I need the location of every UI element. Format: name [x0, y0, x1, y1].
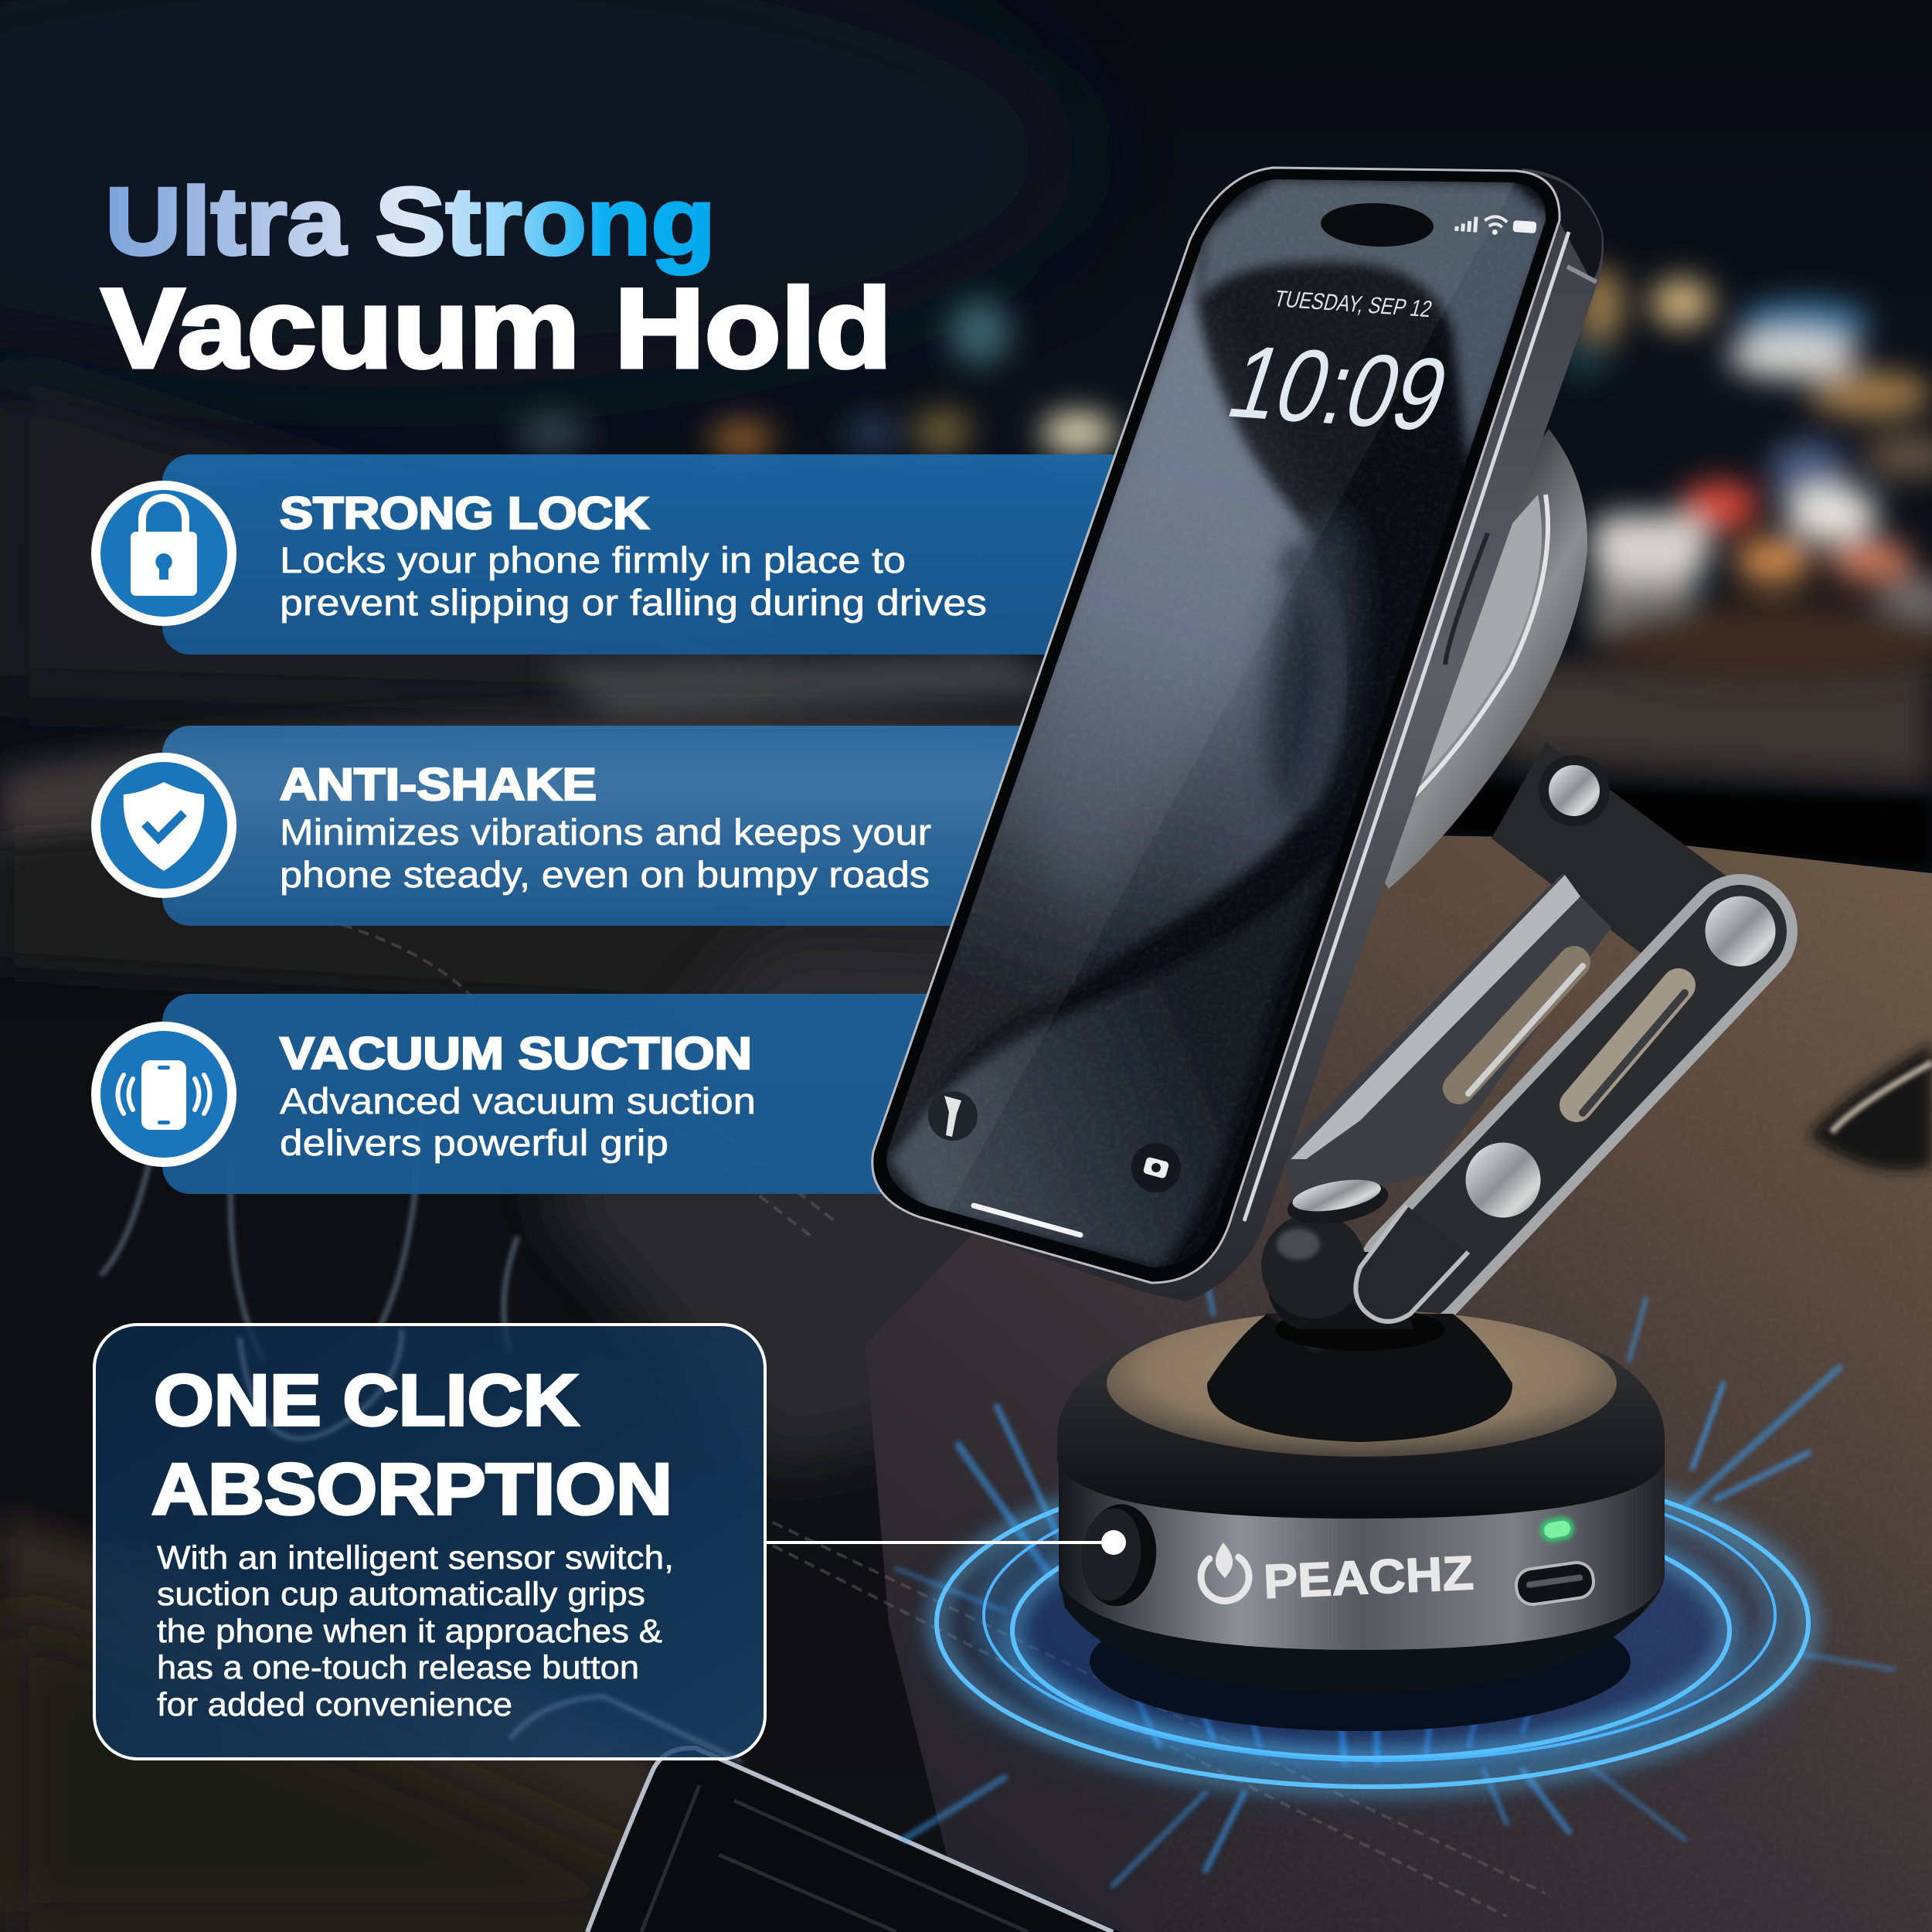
- heading: ANTI-SHAKE: [280, 760, 597, 810]
- main slot: [1577, 985, 1679, 1105]
- home indicator: [974, 1206, 1080, 1235]
- logo mark: [1199, 1541, 1250, 1602]
- pivot bolts: [1464, 755, 1777, 1219]
- dark vent shape on right dashboard: [1808, 1043, 1932, 1171]
- icon: padlock: [96, 485, 232, 621]
- icon: shield check: [96, 757, 232, 893]
- outer ring: [937, 1459, 1808, 1787]
- callout body: has a one-touch release button: [157, 1649, 639, 1686]
- body text: [280, 539, 987, 623]
- camera icon: [1131, 1143, 1181, 1192]
- status LED: [1539, 1515, 1576, 1544]
- suction glow rings and rays: [896, 1275, 1893, 1886]
- brand name: PEACHZ: [1263, 1546, 1475, 1609]
- status icons: [1454, 214, 1537, 238]
- connector line and dot: [765, 1530, 1126, 1555]
- middle ring: [984, 1470, 1775, 1760]
- title line 2: Vacuum Hold: [101, 265, 892, 391]
- flashlight icon: [928, 1091, 978, 1141]
- body text: delivers powerful grip: [280, 1122, 668, 1163]
- callout body: suction cup automatically grips: [157, 1576, 645, 1613]
- stem: [1275, 1308, 1445, 1351]
- rear silver link: [1283, 873, 1611, 1206]
- upper arm link: [1492, 742, 1785, 1005]
- heading: STRONG LOCK: [280, 488, 649, 539]
- lid: [1057, 1314, 1665, 1519]
- body text: phone steady, even on bumpy roads: [280, 854, 930, 895]
- body text: prevent slipping or falling during drives: [280, 582, 987, 623]
- lid top reflection: [1107, 1310, 1617, 1457]
- callout body: With an intelligent sensor switch,: [157, 1539, 674, 1577]
- dynamic island: [1320, 201, 1434, 249]
- date text: TUESDAY, SEP 12: [1271, 287, 1435, 322]
- knob: [1284, 1173, 1392, 1231]
- lock screen: [886, 179, 1546, 1267]
- USB-C port: [1514, 1560, 1596, 1607]
- wallpaper grain: [850, 155, 1584, 1298]
- callout heading: ONE CLICK: [154, 1359, 579, 1440]
- phone side frame: [889, 168, 1604, 1301]
- title: [101, 168, 892, 391]
- callout body: for added convenience: [157, 1686, 512, 1723]
- callout body: [157, 1539, 674, 1723]
- side highlight: [1244, 232, 1569, 1221]
- rear slot: [1459, 962, 1574, 1088]
- magnetic disc behind phone: [1314, 429, 1587, 889]
- title line 1: Ultra Strong: [105, 168, 716, 275]
- callout body: the phone when it approaches &: [157, 1613, 662, 1650]
- folding arm: [1283, 742, 1785, 1275]
- wallpaper light area: [872, 229, 1339, 1159]
- body text: [280, 1080, 756, 1163]
- body text: Minimizes vibrations and keeps your: [280, 811, 931, 852]
- panel: anti-shake: [96, 726, 1167, 926]
- stitching lines: [325, 920, 1546, 1917]
- phone: [850, 155, 1604, 1301]
- bokeh lights: [518, 267, 1932, 680]
- panel: vacuum suction: [96, 994, 1167, 1194]
- callout: one click absorption: [94, 1325, 765, 1762]
- main arm lower end outline: [1355, 1206, 1468, 1321]
- body text: Advanced vacuum suction: [280, 1080, 756, 1121]
- clock: 10:09: [1216, 324, 1462, 452]
- callout heading: [151, 1359, 672, 1529]
- callout heading: ABSORPTION: [151, 1448, 672, 1529]
- action button: [1445, 533, 1488, 665]
- phone front: [872, 168, 1560, 1283]
- icon: vibrating phone: [96, 1026, 232, 1162]
- body text: [280, 811, 931, 895]
- main arm bar: [1414, 931, 1740, 1275]
- gauge arcs: [97, 1164, 522, 1360]
- heading: VACUUM SUCTION: [280, 1029, 752, 1079]
- release button: [1077, 1501, 1162, 1610]
- lower band edge: [1060, 1577, 1665, 1692]
- dark underside: [1090, 1592, 1631, 1731]
- body text: Locks your phone firmly in place to: [280, 539, 906, 580]
- ball joint and knob: [1261, 1173, 1468, 1329]
- cone: [1207, 1314, 1512, 1442]
- glass glare: [850, 155, 1522, 1213]
- suction base: [1057, 1308, 1665, 1731]
- inner ring: [1012, 1503, 1730, 1758]
- panel: strong lock: [96, 454, 1167, 655]
